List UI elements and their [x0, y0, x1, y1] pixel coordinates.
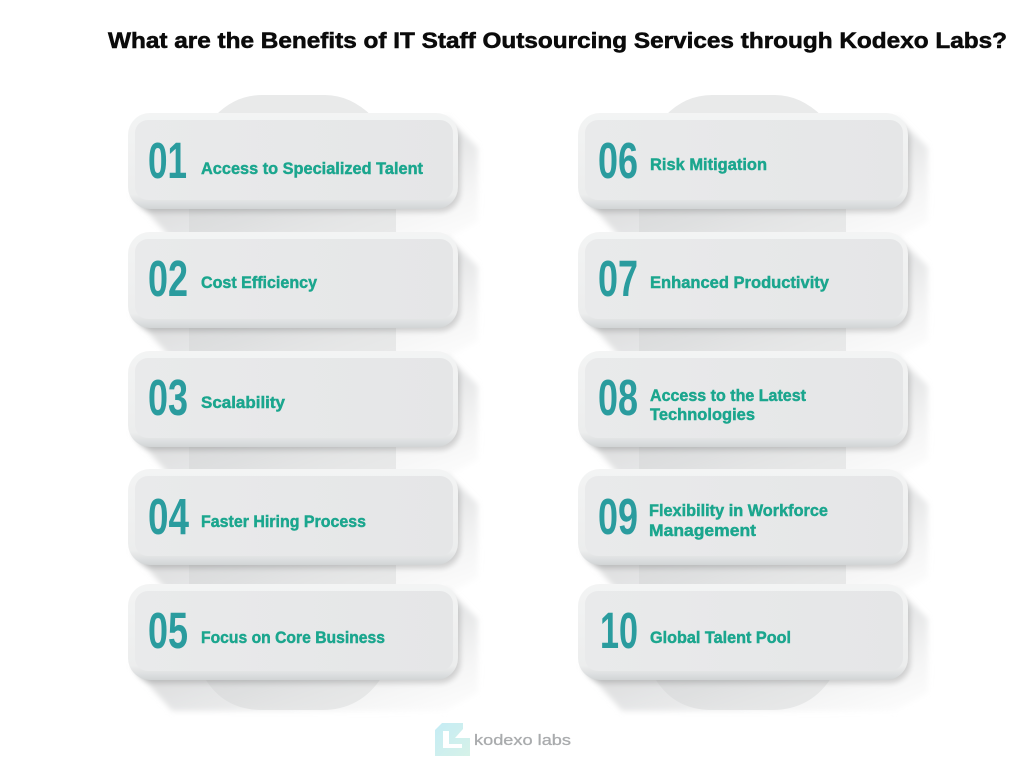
card 07: 07 [598, 250, 638, 307]
panel: right column backing shape [639, 95, 846, 710]
card 02: 02 [148, 250, 188, 307]
card 03: Scalability [201, 394, 286, 412]
icon: kodexo logo mark [435, 723, 470, 756]
card 08 [578, 351, 928, 478]
card 10: Global Talent Pool [650, 629, 791, 647]
card 09 [578, 469, 928, 596]
card 02 [128, 232, 478, 359]
card 01: Access to Specialized Talent [201, 160, 423, 178]
card 05: Focus on Core Business [201, 629, 385, 647]
card 09: 09 [598, 488, 638, 545]
card 06: 06 [598, 132, 638, 189]
card 04: Faster Hiring Process [201, 513, 366, 531]
wordmark: kodexo labs [474, 732, 571, 749]
card 08: Access to the Latest [650, 387, 806, 405]
card 04 [128, 469, 478, 596]
card 10 [578, 584, 928, 711]
card 06 [578, 113, 928, 240]
card 09: Management [649, 522, 757, 540]
title: What are the Benefits of IT Staff Outsourcing Services through Kodexo Labs? [108, 28, 1007, 53]
card 09: Flexibility in Workforce [649, 502, 828, 520]
card 04: 04 [148, 488, 189, 545]
card 03 [128, 351, 478, 478]
card 08: Technologies [650, 406, 755, 424]
card 05 [128, 584, 478, 711]
card 07: Enhanced Productivity [650, 274, 830, 292]
card 05: 05 [148, 602, 188, 659]
logo: kodexo labs [435, 723, 571, 756]
card 10: 10 [600, 602, 638, 659]
panel: left column backing shape [189, 95, 396, 710]
card 02: Cost Efficiency [201, 274, 318, 292]
card 01: 01 [148, 132, 187, 189]
card 01 [128, 113, 478, 240]
card 08: 08 [598, 369, 638, 426]
card 07 [578, 232, 928, 359]
card 03: 03 [148, 369, 188, 426]
card 06: Risk Mitigation [650, 156, 767, 174]
